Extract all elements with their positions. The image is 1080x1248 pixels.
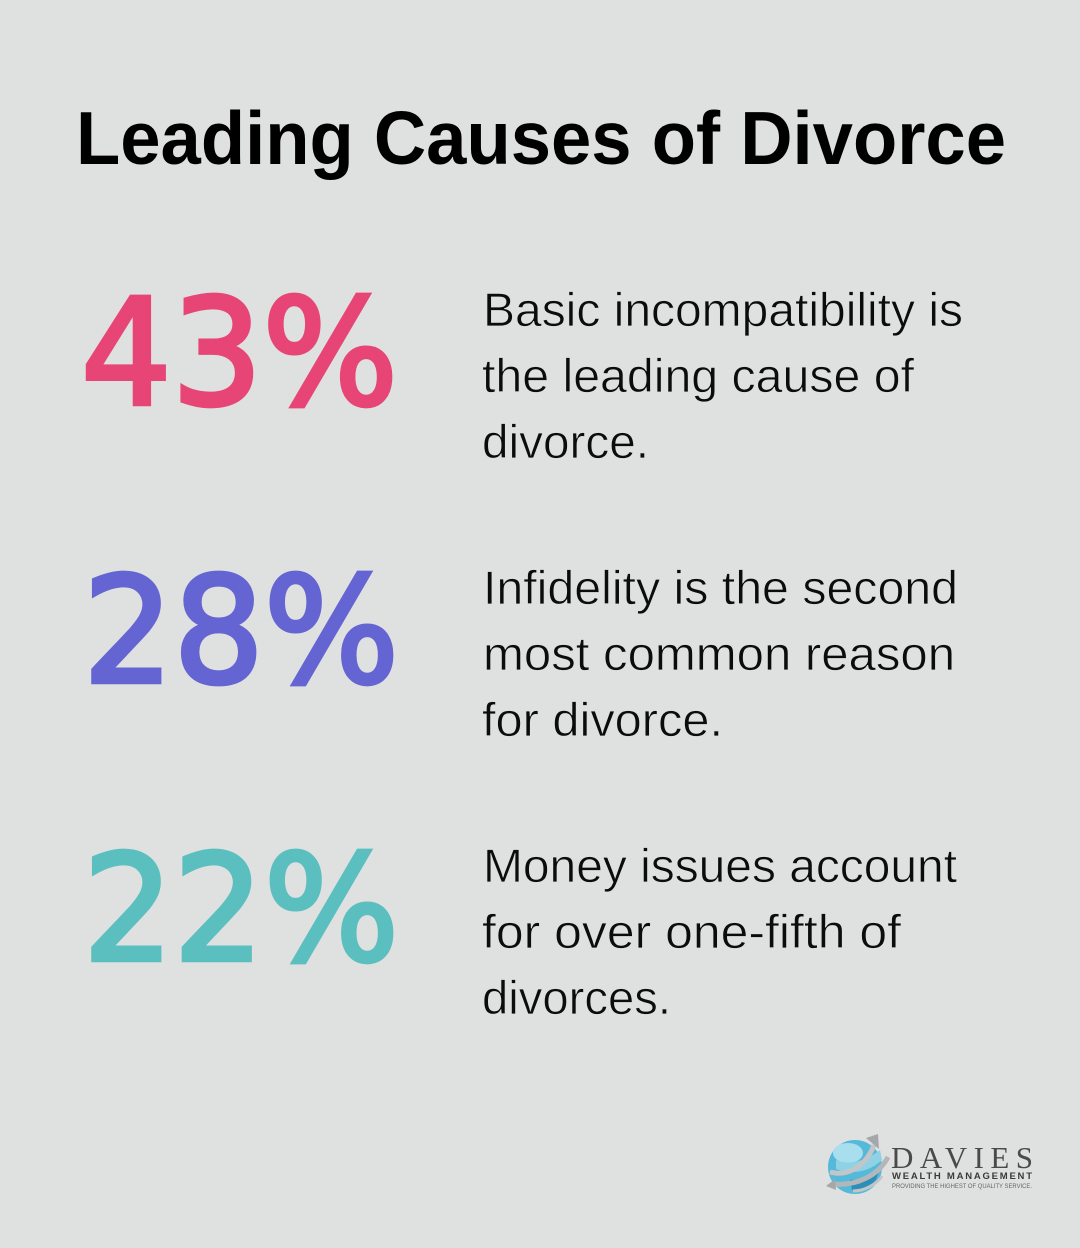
number: 22%: 22% [83,824,399,995]
logo: Davies Wealth Management [826,1134,1033,1194]
description: incompatibility [482,284,963,469]
description: infidelity: Infidelity is the second [483,562,958,615]
description: infidelity [482,562,958,747]
description: incompatibility: divorce. [482,416,649,469]
stat: 22% money issues [83,824,957,1025]
number: 43%: 43% [81,268,398,439]
wordmark: Wealth Management: WEALTH MANAGEMENT [892,1171,1032,1182]
icon: globe with arrows [826,1134,888,1194]
description: money issues: Money issues account [483,840,957,893]
description: money issues [482,840,957,1025]
stat: 43% basic incompatibility [81,268,963,469]
description: money issues: divorces. [482,972,671,1025]
tagline: PROVIDING THE HIGHEST OF QUALITY SERVICE. [892,1184,1032,1190]
description: incompatibility: Basic incompatibility is [483,284,963,337]
number: 28%: 28% [83,546,399,717]
wordmark: DAVIES: DAVIES [891,1140,1033,1175]
stat: 28% infidelity [83,546,958,747]
description: infidelity: for divorce. [482,694,723,747]
description: money issues: for over one-fifth of [482,906,902,959]
description: incompatibility: the leading cause of [482,350,915,403]
title: Leading Causes of Divorce [76,96,1006,180]
description: infidelity: most common reason [483,628,955,681]
